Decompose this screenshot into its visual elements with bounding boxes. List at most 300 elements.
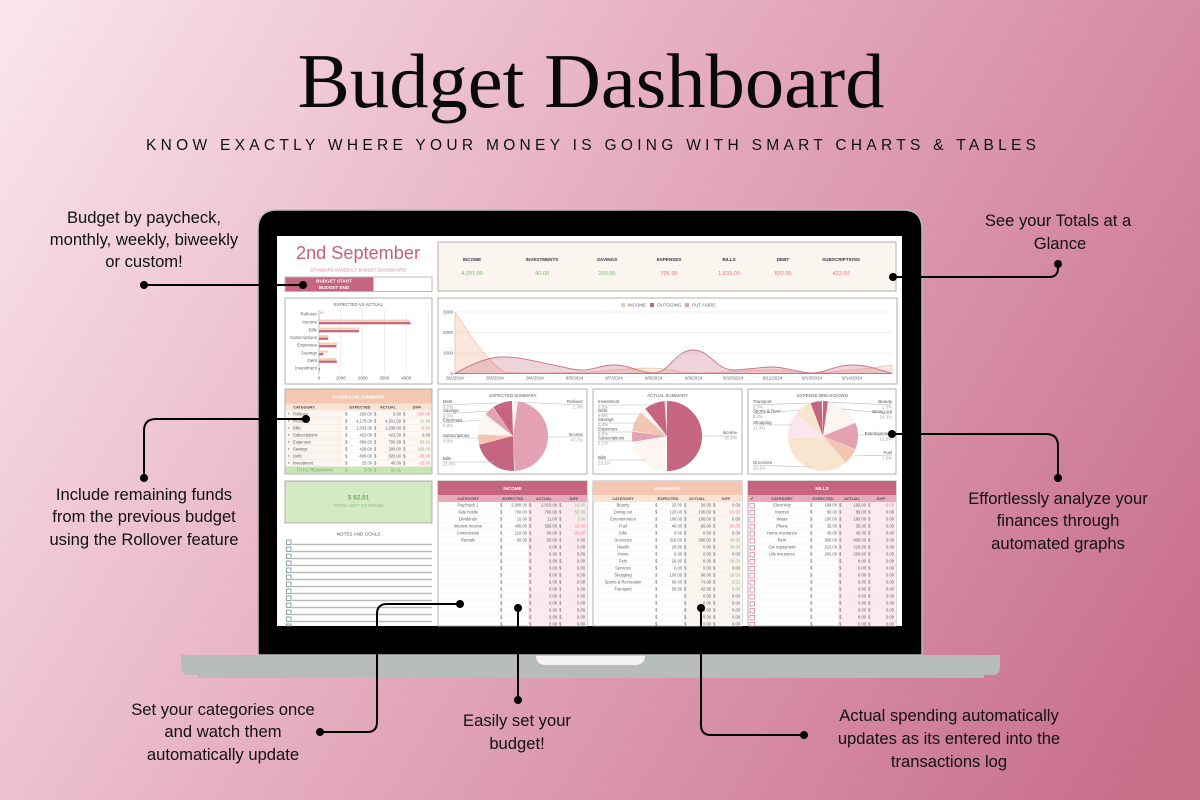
pie chart: expected summary: 9.8%: [443, 423, 453, 428]
table: expenses: $: [655, 502, 658, 507]
pie chart: actual summary: 9.6%: [598, 432, 608, 436]
table: income: Interest Income: [454, 523, 483, 528]
table: bills: $: [839, 523, 842, 528]
table: income: $: [559, 509, 562, 514]
panel: KPI totals: SAVINGS: [597, 257, 617, 262]
panel: cashflow summary: DIFF: [413, 404, 422, 409]
panel: KPI totals: INVESTMENTS: [526, 257, 558, 262]
table: expenses: 0.00: [703, 621, 712, 626]
table: expenses: $: [655, 621, 658, 626]
table: expenses: $: [655, 523, 658, 528]
panel: cashflow summary: $: [374, 425, 377, 430]
table: expenses: $: [655, 565, 658, 570]
pie chart: actual summary: Income: [723, 430, 738, 435]
panel: cashflow summary: CATEGORY: [293, 404, 315, 409]
table: income: $: [559, 523, 562, 528]
panel: cashflow summary: $: [403, 425, 406, 430]
table: income: $: [559, 593, 562, 598]
area chart: income, outgoing, put aside: 9/9/2024: [685, 376, 703, 380]
table: bills: 0.00: [858, 558, 867, 563]
outgoing area: [455, 350, 892, 374]
table: income: 50.00: [517, 537, 528, 542]
area chart: income, outgoing, put aside: 9/11/2024: [763, 376, 783, 380]
pie chart: actual summary: 9.9%: [598, 413, 608, 418]
table: income: 0.00: [577, 621, 586, 626]
table: income: $: [559, 516, 562, 521]
panel: cashflow summary: $: [403, 432, 406, 437]
table: expenses: $: [684, 523, 687, 528]
callout: budget by paycheck: Budget by paycheck,: [67, 208, 221, 227]
pie chart: expected summary: 21.9%: [443, 462, 456, 466]
arrow: graphs connector: [888, 430, 1062, 482]
table: bills: 0.00: [886, 593, 895, 598]
arrow: totals connector: [889, 260, 1062, 281]
table: income: 0.00: [549, 579, 558, 584]
table: expenses: 40.00: [672, 523, 683, 528]
table: bills: 0.00: [858, 614, 867, 619]
panel: cashflow summary: CASHFLOW SUMMARY: [333, 394, 384, 400]
area chart: income, outgoing, put aside: 9/2/2024: [446, 376, 464, 380]
table: income: Side hustle: [458, 509, 479, 514]
table: bills: $: [868, 586, 871, 591]
budget dates: BUDGET START: [316, 278, 352, 284]
panel: cashflow summary: $: [403, 411, 406, 416]
table: income: 0.00: [577, 558, 586, 563]
panel: KPI totals: SUBSCRIPTIONS: [822, 257, 860, 262]
arrow: categories connector: [316, 600, 464, 736]
panel: cashflow summary: -15.00: [418, 460, 431, 465]
subtitle: KNOW EXACTLY WHERE YOUR MONEY IS GOING WITH SMART CHARTS & TABLES: [146, 137, 1036, 154]
laptop: [181, 210, 1000, 678]
area chart: income, outgoing, put aside: 3000: [443, 310, 453, 314]
table: expenses: $: [684, 614, 687, 619]
panel: cashflow summary: 63.01: [420, 439, 431, 444]
table: bills: $: [810, 516, 813, 521]
table: income: 0.00: [549, 544, 558, 549]
table: bills: [748, 481, 896, 626]
callout: budget by paycheck: or custom!: [105, 252, 183, 271]
area chart: income, outgoing, put aside: [438, 298, 897, 384]
table: bills: Internet: [775, 509, 790, 514]
table: expenses: $: [713, 523, 716, 528]
table: bills: 0.00: [886, 551, 895, 556]
table: bills: Car repayment: [768, 544, 796, 549]
title: Budget Dashboard: [298, 38, 884, 124]
panel: cashflow summary: 423.00: [388, 432, 402, 437]
panel: cashflow summary: 4,170.00: [356, 418, 373, 423]
table: expenses: $: [684, 572, 687, 577]
table: expenses: Fuel: [619, 523, 627, 528]
callout: budget by paycheck: [50, 208, 307, 289]
table: bills: 0.00: [858, 600, 867, 605]
table: bills: $: [839, 607, 842, 612]
panel: cashflow summary: •: [288, 425, 290, 430]
table: bills: 900.00: [824, 537, 838, 542]
table: expenses: $: [655, 537, 658, 542]
callout: totals at a glance: See your Totals at a: [985, 211, 1132, 230]
table: income: 0.00: [549, 551, 558, 556]
callout: categories: and watch them: [164, 722, 282, 741]
table: income: $: [500, 593, 503, 598]
table: expenses: $: [655, 558, 658, 563]
bar chart: expected vs actual: Subscriptions: [290, 335, 318, 340]
table: bills: 200.00: [853, 551, 867, 556]
panel: cashflow summary: 423.00: [359, 432, 373, 437]
table: expenses: 0.00: [732, 593, 741, 598]
table: bills: 200.00: [824, 551, 838, 556]
table: expenses: 130.00: [698, 509, 712, 514]
table: income: $: [529, 572, 532, 577]
legend: PUT ASIDE: [692, 302, 715, 308]
table: expenses: $: [684, 544, 687, 549]
area chart: income, outgoing, put aside: 0: [450, 371, 453, 376]
table: expenses: $: [713, 502, 716, 507]
panel: cashflow summary: $: [374, 446, 377, 451]
table: bills: $: [868, 607, 871, 612]
table: income: [438, 481, 587, 626]
table: bills: 900.00: [853, 537, 867, 542]
table: income: $: [559, 621, 562, 626]
table: bills: 0.00: [886, 558, 895, 563]
pie chart: expense breakdown: 16.3%: [880, 414, 892, 420]
table: expenses: EXPECTED: [658, 496, 679, 501]
table: expenses: $: [713, 509, 716, 514]
table: expenses: Dining out: [614, 509, 633, 514]
table: expenses: DIFF: [722, 496, 731, 501]
panel: KPI totals: 40.00: [535, 271, 549, 277]
table: bills: $: [868, 516, 871, 521]
table: bills: $: [810, 551, 813, 556]
panel: cashflow summary: Subscriptions: [293, 432, 318, 437]
table: bills: $: [810, 544, 813, 549]
table: income: $: [559, 502, 562, 507]
legend: OUTGOING: [657, 302, 682, 308]
table: expenses: $: [684, 516, 687, 521]
pie chart: expense breakdown: 2.5%: [882, 404, 892, 410]
bar chart: expected vs actual: 2000: [358, 376, 368, 380]
pie chart: expected summary: Subscriptions: [443, 433, 470, 438]
table: expenses: $: [684, 600, 687, 605]
table: income: 0.00: [577, 551, 586, 556]
table: income: $: [529, 621, 532, 626]
panel: cashflow summary: $: [374, 418, 377, 423]
bar chart: expected vs actual: [285, 298, 432, 384]
panel: KPI totals: DEBT: [777, 257, 789, 262]
table: expenses: 0.00: [732, 621, 741, 626]
table: expenses: $: [655, 579, 658, 584]
table: expenses: Transport: [614, 586, 633, 591]
table: income: $: [529, 565, 532, 570]
table: income: $: [500, 544, 503, 549]
arrow: budget connector: [514, 604, 522, 704]
dashboard subtitle: STANDARD BIWEEKLY BUDGET DASHBOARD: [310, 268, 406, 272]
table: expenses: EXPENSES: [655, 486, 680, 491]
callout: actual spending: transactions log: [891, 752, 1007, 771]
table: expenses: 120.00: [669, 509, 683, 514]
pie chart: expense breakdown: 11.3%: [753, 426, 765, 430]
panel: cashflow summary: 0.00: [364, 467, 373, 472]
table: bills: 195.00: [853, 502, 867, 507]
table: expenses: 0.00: [732, 516, 741, 521]
pie chart: expense breakdown: 8.4%: [753, 414, 763, 419]
panel: cashflow summary: $: [374, 460, 377, 465]
table: income: $: [500, 614, 503, 619]
table: expenses: 0.00: [732, 530, 741, 535]
table: income: $: [529, 509, 532, 514]
table: expenses: $: [655, 551, 658, 556]
pie chart: expected summary: 47.7%: [571, 438, 583, 442]
panel: cashflow summary: 82.01: [391, 467, 402, 472]
panel: total left to spend: $ 82.01: [348, 494, 370, 502]
panel: cashflow summary: 0.00: [393, 411, 402, 416]
panel: cashflow summary: 429.00: [359, 446, 373, 451]
table: income: $: [500, 530, 503, 535]
table: bills: 0.00: [858, 593, 867, 598]
table: expenses: $: [713, 551, 716, 556]
table: income: Paycheck 1: [457, 502, 479, 507]
table: income: $: [559, 579, 562, 584]
table: bills: 0.00: [886, 572, 895, 577]
table: expenses: -20.00: [728, 523, 741, 528]
pie chart: expense breakdown: Entertainment: [865, 431, 893, 436]
table: income: $: [500, 600, 503, 605]
table: income: $: [559, 614, 562, 619]
legend: INCOME: [628, 302, 646, 308]
table: bills: $: [810, 607, 813, 612]
panel: cashflow summary: 1,839.00: [385, 425, 402, 430]
bar chart: expected vs actual: Debt: [307, 358, 318, 363]
area chart: income, outgoing, put aside: 9/4/2024: [526, 376, 544, 380]
panel: cashflow summary: 229.00: [417, 446, 431, 451]
table: income: 2,910.00: [541, 502, 558, 507]
table: expenses: $: [655, 516, 658, 521]
panel: cashflow summary: $: [345, 453, 348, 458]
table: bills: $: [810, 621, 813, 626]
table: income: $: [500, 502, 503, 507]
table: income: $: [559, 558, 562, 563]
callout: categories: [131, 600, 464, 764]
table: income: EXPECTED: [503, 496, 524, 501]
pie chart: expense breakdown: Beauty: [878, 399, 893, 404]
panel: KPI totals: 200.00: [598, 271, 616, 277]
panel: cashflow summary: $: [345, 439, 348, 444]
table: bills: $: [810, 565, 813, 570]
table: expenses: $: [684, 537, 687, 542]
table: income: $: [559, 586, 562, 591]
table: income: $: [500, 572, 503, 577]
table: income: 90.00: [547, 530, 558, 535]
panel: cashflow summary: Savings: [293, 446, 308, 451]
bar chart: expected vs actual: Expenses: [297, 342, 318, 348]
callout: automated graphs: finances through: [997, 511, 1119, 530]
bar chart: expected vs actual: Savings: [301, 350, 318, 356]
table: income: Rentals: [461, 537, 475, 542]
pie chart: actual summary: 2.4%: [598, 422, 608, 427]
pie chart: expected summary: [438, 389, 587, 474]
table: bills: $: [839, 502, 842, 507]
table: income: 0.00: [549, 572, 558, 577]
table: bills: 0.00: [858, 586, 867, 591]
arrow: rollover connector: [140, 415, 310, 482]
table: income: 2,900.00: [511, 502, 528, 507]
table: bills: -6.00: [885, 502, 895, 507]
table: expenses: 8.00: [732, 586, 741, 591]
pie chart: expense breakdown: EXPENSE BREAKDOWN: [797, 393, 848, 398]
panel: cashflow summary: $: [403, 446, 406, 451]
table: expenses: $: [655, 600, 658, 605]
callout: rollover feature: from the previous budget: [52, 507, 236, 526]
table: income: $: [500, 509, 503, 514]
panel: cashflow summary: $: [345, 460, 348, 465]
table: bills: $: [810, 586, 813, 591]
table: bills: 35.00: [856, 523, 867, 528]
table: expenses: Pets: [619, 558, 627, 563]
table: expenses: 60.00: [701, 523, 712, 528]
table: bills: $: [810, 572, 813, 577]
table: income: ACTUAL: [536, 496, 553, 501]
table: income: $: [529, 516, 532, 521]
panel: cashflow summary: 860.00: [359, 439, 373, 444]
table: income: $: [559, 607, 562, 612]
table: bills: 0.00: [886, 537, 895, 542]
table: bills: ✔: [750, 496, 754, 501]
table: expenses: $: [713, 530, 716, 535]
table: income: 0.00: [549, 600, 558, 605]
pie chart: expected summary: 2.3%: [573, 404, 583, 410]
table: expenses: 0.00: [703, 544, 712, 549]
table: expenses: 0.00: [732, 614, 741, 619]
table: income: $: [500, 579, 503, 584]
callout: categories: automatically update: [147, 745, 299, 764]
panel: cashflow summary: $: [374, 411, 377, 416]
table: bills: $: [839, 530, 842, 535]
pie chart: expected summary: Expenses: [443, 418, 463, 422]
pie chart: expense breakdown: Dining out: [872, 409, 893, 414]
table: bills: EXPECTED: [813, 496, 834, 501]
table: bills: 89.00: [827, 509, 838, 514]
table: income: $: [500, 607, 503, 612]
panel: cashflow summary: TOTAL REMAINING: [296, 467, 334, 472]
table: income: $: [529, 614, 532, 619]
table: expenses: $: [655, 509, 658, 514]
area chart: income, outgoing, put aside: 9/14/2024: [842, 376, 863, 380]
panel: cashflow summary: $: [345, 467, 348, 472]
panel: KPI totals: BILLS: [722, 257, 736, 262]
panel: KPI totals: 820.00: [774, 271, 792, 277]
table: income: $: [500, 537, 503, 542]
pie chart: expense breakdown: Sports & Recr: [753, 408, 781, 414]
table: income: $: [559, 530, 562, 535]
callout: categories: Set your categories once: [131, 700, 315, 719]
table: bills: $: [839, 572, 842, 577]
table: bills: 0.00: [886, 614, 895, 619]
table: income: $: [559, 565, 562, 570]
panel: cashflow summary: $: [345, 411, 348, 416]
table: bills: 180.00: [824, 516, 838, 521]
panel: cashflow summary: EXPECTED: [350, 404, 371, 409]
table: bills: $: [868, 572, 871, 577]
table: bills: BILLS: [815, 486, 829, 491]
panel: cashflow summary: $: [374, 432, 377, 437]
table: bills: $: [839, 544, 842, 549]
pie chart: expense breakdown: Fuel: [883, 450, 892, 455]
laptop bezel: [258, 210, 922, 655]
panel: cashflow summary: 820.00: [388, 453, 402, 458]
table: expenses: $: [684, 558, 687, 563]
callout: set your budget: [463, 604, 571, 753]
callout: rollover feature: [49, 415, 310, 549]
table: expenses: 0.00: [732, 600, 741, 605]
table: bills: 0.00: [886, 523, 895, 528]
table: expenses: $: [684, 607, 687, 612]
table: income: $: [500, 586, 503, 591]
table: income: 1.00: [577, 516, 586, 521]
table: bills: Rent: [778, 537, 787, 542]
table: expenses: $: [684, 551, 687, 556]
panel: total left to spend: [285, 481, 432, 523]
pie chart: expected summary: 4.9%: [443, 414, 453, 418]
table: income: $: [529, 607, 532, 612]
callout: set your budget: budget!: [489, 734, 545, 753]
table: income: 11.00: [547, 516, 558, 521]
table: bills: $: [839, 600, 842, 605]
table: expenses: 74.99: [701, 579, 712, 584]
table: income: 10.00: [575, 502, 586, 507]
table: bills: 180.00: [853, 516, 867, 521]
table: income: 0.00: [549, 565, 558, 570]
area chart: income, outgoing, put aside: 2000: [443, 330, 453, 335]
table: expenses: 280.00: [698, 537, 712, 542]
table: bills: 0.00: [886, 607, 895, 612]
table: bills: 89.00: [856, 509, 867, 514]
table: income: 0.00: [577, 600, 586, 605]
table: bills: 0.00: [886, 565, 895, 570]
table: income: 0.00: [577, 579, 586, 584]
table: income: $: [529, 537, 532, 542]
table: bills: $: [868, 509, 871, 514]
panel: cashflow summary: $: [345, 418, 348, 423]
panel: cashflow summary: 1,833.00: [356, 425, 373, 430]
table: expenses: ACTUAL: [689, 496, 706, 501]
table: bills: $: [839, 558, 842, 563]
table: bills: 40.00: [856, 530, 867, 535]
panel: cashflow summary: $: [374, 467, 377, 472]
callout: automated graphs: automated graphs: [991, 534, 1125, 553]
table: income: 0.00: [577, 537, 586, 542]
panel: cashflow summary: 40.00: [391, 460, 402, 465]
table: expenses: [593, 481, 742, 626]
table: expenses: $: [713, 586, 716, 591]
pie chart: expense breakdown: 7.5%: [882, 456, 892, 460]
table: income: $: [500, 558, 503, 563]
panel: cashflow summary: $: [403, 453, 406, 458]
panel: notes and goals: [286, 532, 432, 626]
table: expenses: 100.00: [698, 516, 712, 521]
pie chart: expense breakdown: [748, 389, 896, 474]
table: bills: 0.00: [886, 530, 895, 535]
pie chart: expected summary: 9.2%: [443, 404, 453, 410]
callout: rollover feature: using the Rollover feature: [49, 530, 239, 549]
table: income: $: [529, 558, 532, 563]
pie chart: expense breakdown: Transport: [753, 399, 772, 404]
panel: KPI totals: 423.00: [832, 271, 850, 277]
table: bills: 210.00: [853, 544, 867, 549]
table: bills: Phone: [776, 523, 789, 528]
table: expenses: $: [655, 593, 658, 598]
pie chart: actual summary: Debt: [598, 408, 608, 413]
table: income: CATEGORY: [457, 496, 479, 501]
panel: cashflow summary: $: [345, 432, 348, 437]
